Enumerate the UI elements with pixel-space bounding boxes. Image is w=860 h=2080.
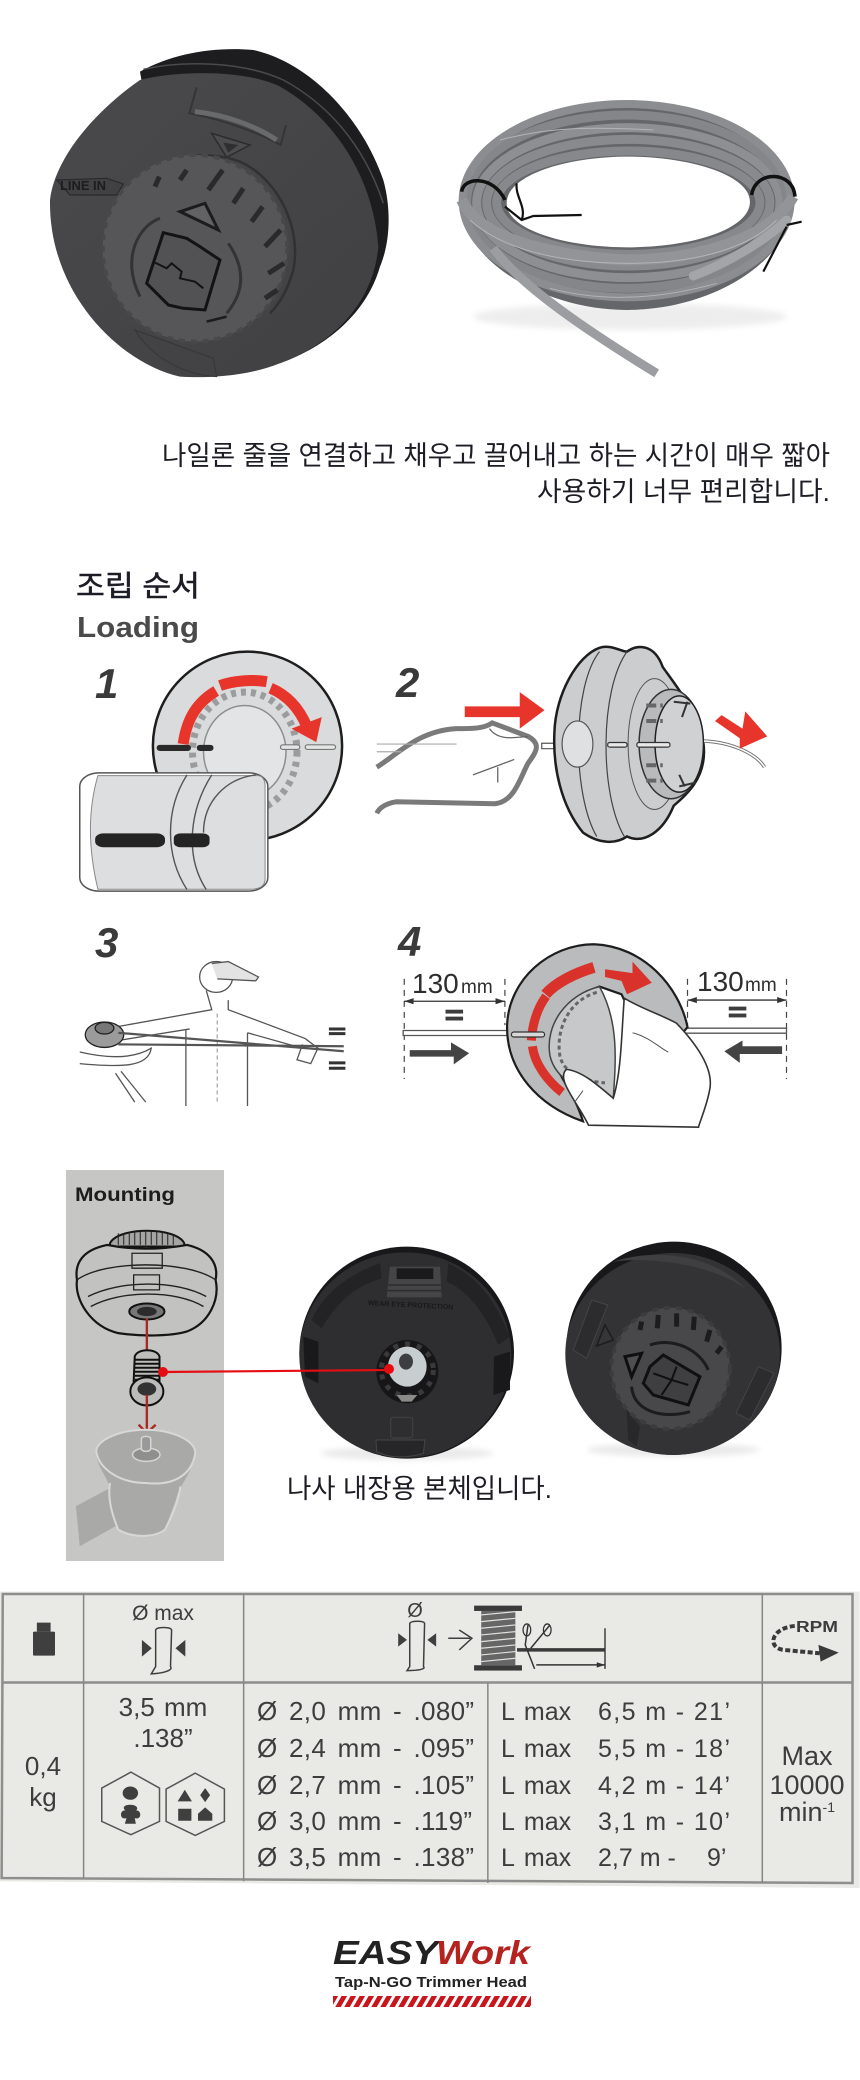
photo: trimmer head rear with threaded insert	[299, 1247, 514, 1460]
heading: Mounting: Mounting	[75, 1185, 175, 1206]
icon: weight	[33, 1623, 55, 1656]
photo: trimmer head front right	[565, 1242, 782, 1457]
heading: assembly order: 조립 순서	[76, 570, 200, 603]
max length column: L max	[501, 1844, 572, 1872]
step 1 diagram	[80, 652, 342, 891]
line sizes column: Ø 2,0 mm - .080”	[257, 1696, 474, 1726]
spec table: 3,5 mm	[119, 1692, 207, 1722]
heading: Loading: Loading	[77, 612, 199, 644]
spec table: Ø	[407, 1600, 423, 1622]
step 3 diagram	[80, 919, 345, 1106]
callout: red connector line	[158, 1364, 394, 1377]
icon: line diameter	[142, 1627, 185, 1674]
logo: EASYWork Tap-N-GO Trimmer Head: EASY	[333, 1934, 441, 1971]
icon: hex cover marks	[102, 1772, 224, 1835]
max length column: 5,5 m - 18’	[598, 1735, 730, 1763]
step 4 diagram	[397, 918, 786, 1127]
reel marking: LINE IN: LINE IN	[60, 178, 106, 193]
photo: coil of nylon line	[460, 103, 802, 373]
spec table: Ø max	[132, 1602, 194, 1625]
line sizes column: Ø 2,7 mm - .105”	[257, 1770, 474, 1800]
max length column: 3,1 m - 10’	[598, 1808, 730, 1836]
icon: line spool and length	[398, 1606, 605, 1671]
step 3 diagram: 3	[95, 919, 118, 966]
step 4 diagram: mm	[461, 977, 493, 998]
max length column: 4,2 m - 14’	[598, 1772, 730, 1800]
photo: trimmer head front view	[50, 49, 389, 377]
caption: threaded body: 나사 내장용 본체입니다.	[287, 1474, 552, 1504]
step 4 diagram: 130	[697, 966, 744, 997]
spec table: 0,4	[25, 1751, 61, 1781]
step 4 diagram: 4	[397, 918, 421, 965]
line sizes column: Ø 3,0 mm - .119”	[257, 1806, 472, 1836]
rpm value	[769, 1741, 845, 1827]
rpm value: min	[779, 1797, 823, 1827]
logo: EASYWork Tap-N-GO Trimmer Head: Tap-N-GO Trimmer Head	[335, 1974, 527, 1991]
spec table: .138”	[133, 1723, 193, 1753]
spec table	[0, 1592, 860, 1888]
logo: EASYWork Tap-N-GO Trimmer Head	[333, 1934, 532, 2007]
spec table: kg	[29, 1782, 57, 1812]
rpm value: Max	[781, 1741, 833, 1771]
spec table: RPM	[796, 1619, 838, 1636]
line sizes column: Ø 3,5 mm - .138”	[257, 1842, 474, 1872]
max length column: 6,5 m - 21’	[598, 1698, 730, 1726]
max length column: 9’	[707, 1844, 726, 1872]
step 2 diagram	[377, 647, 767, 842]
step 1 diagram: 1	[95, 660, 118, 707]
rear marking: WEAR EYE PROTECTION	[368, 1300, 453, 1311]
step 4 diagram: 130	[412, 968, 459, 999]
caption: ease of use: 사용하기 너무 편리합니다.	[537, 477, 830, 507]
max length column: L max	[501, 1808, 572, 1836]
line sizes column: Ø 2,4 mm - .095”	[257, 1733, 474, 1763]
rpm value: -1	[823, 1799, 835, 1815]
max length column: L max	[501, 1772, 572, 1800]
max length column: L max	[501, 1735, 572, 1763]
step 4 diagram: mm	[745, 975, 777, 996]
max length column: L max	[501, 1698, 572, 1726]
max length column	[501, 1698, 730, 1872]
rpm value: 10000	[769, 1770, 845, 1800]
caption: ease of use	[162, 441, 830, 507]
panel: mounting diagram	[66, 1170, 224, 1561]
caption: ease of use: 나일론 줄을 연결하고 채우고 끌어내고 하는 시간이 매우 짧아	[162, 441, 830, 471]
icon: rotation arrow	[773, 1626, 839, 1662]
line sizes column	[257, 1696, 474, 1872]
logo: EASYWork Tap-N-GO Trimmer Head: Work	[436, 1934, 532, 1971]
max length column: 2,7 m -	[598, 1844, 676, 1872]
step 2 diagram: 2	[395, 659, 419, 706]
